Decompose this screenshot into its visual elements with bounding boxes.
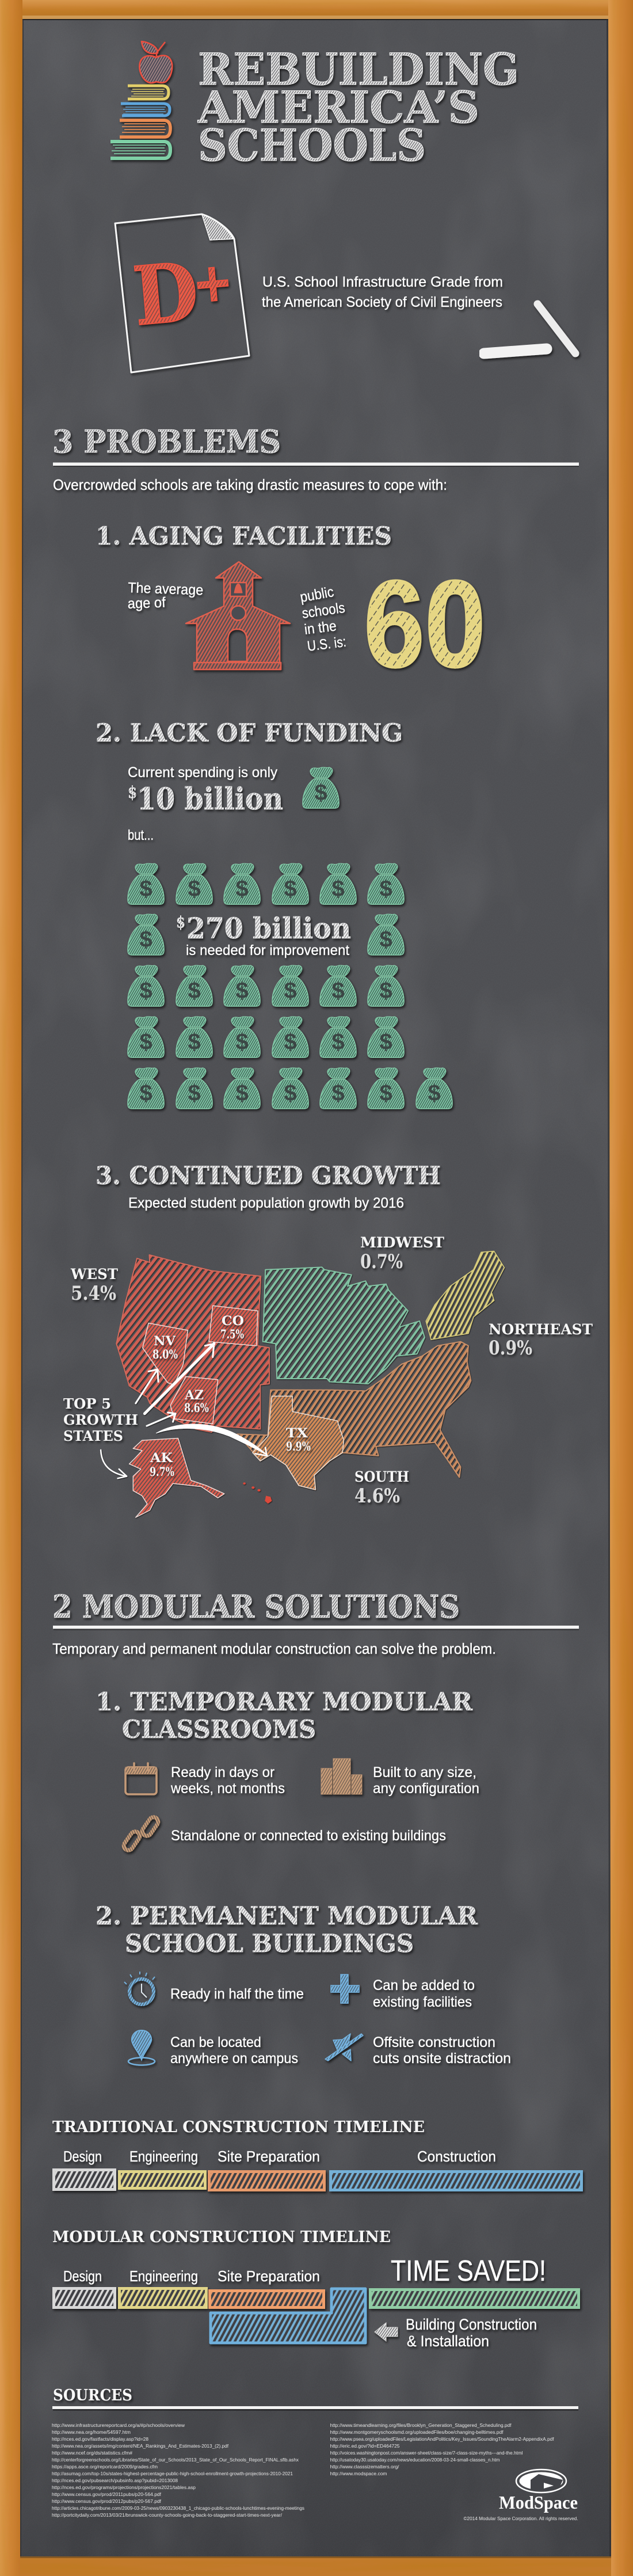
text: public schools in the U.S. is: [299, 584, 347, 655]
sources list: left column: http://articles.chicagotribune.com/2009-03-25/news/0903230438_1_chicago-public-schools-lunchtimes-evening-meetings: [52, 2505, 304, 2511]
timeline labels: Engineering: [129, 2267, 198, 2285]
map state: Alaska: [129, 1439, 224, 1517]
money bag grid: $: [139, 1080, 152, 1106]
money bag grid: $: [188, 876, 201, 901]
timeline labels: [63, 2148, 496, 2165]
map state: Arizona: [170, 1376, 218, 1424]
timeline bars: [54, 2289, 579, 2343]
text: ready in days: weeks, not months: [170, 1780, 285, 1797]
text: needed for improvement: is needed for improvement: [186, 942, 349, 958]
text: the average age of: [127, 580, 204, 612]
text: offsite construction: [373, 2034, 511, 2067]
icon: schoolhouse: [186, 562, 290, 669]
sources list: right column: http://www.classsizematters.org/: [330, 2464, 399, 2470]
sources list: right column: http://voices.washingtonpost.com/answer-sheet/class-size/7-class-size-myths---and-the.html: [330, 2450, 523, 2456]
sources list: left column: http://www.census.gov/prod/2011pubs/p20-564.pdf: [52, 2491, 162, 2497]
label: Colorado: 7.5%: [220, 1327, 244, 1341]
money bag grid: $: [139, 927, 152, 952]
text: standalone or connected: Standalone or connected to existing buildings: [171, 1828, 446, 1844]
timeline labels: Design: [63, 2148, 102, 2165]
icon: chain link: [122, 1816, 160, 1852]
label: Texas: TX: [286, 1426, 308, 1441]
title: [197, 44, 519, 171]
grade D plus: +: [190, 250, 235, 315]
label: midwest: MIDWEST: [360, 1234, 444, 1251]
icon: clock: [124, 1972, 155, 2004]
sources list: right column: http://eric.ed.gov/?id=ED464725: [330, 2443, 400, 2449]
text: building construction and installation: & Installation: [407, 2333, 489, 2350]
heading: permanent modular school buildings: [96, 1902, 478, 1958]
label: Alaska: AK: [150, 1451, 173, 1466]
sources list: left column: [52, 2422, 304, 2518]
text: can be located: [170, 2034, 298, 2067]
text: building construction and installation: [406, 2316, 537, 2350]
paper outline: [115, 214, 249, 372]
heading: temporary modular classrooms: [96, 1688, 472, 1744]
sources list: left column: http://portcitydaily.com/2013/03/21/brunswick-county-schools-going-back-to-staggered-start-times-next-year/: [52, 2512, 283, 2518]
label: south: 4.6%: [354, 1485, 400, 1508]
heading: traditional timeline: TRADITIONAL CONSTRUCTION TIMELINE: [52, 2118, 425, 2136]
text: ready in half the time: Ready in half the time: [170, 1986, 304, 2002]
text: built to any size: [373, 1764, 479, 1797]
money bag grid: $: [235, 1029, 249, 1055]
icon: yellow book: [128, 86, 169, 99]
timeline labels: Construction: [417, 2148, 496, 2165]
icon: orange book: [120, 120, 170, 137]
sources list: left column: http://centerforgreenschools.org/Libraries/State_of_our_Schools/2013_State_of_Our_Schools_Report_FINAL.sflb.ashx: [52, 2457, 299, 2463]
text: can be added: Can be added to: [373, 1977, 475, 1993]
label: midwest: 0.7%: [360, 1250, 403, 1273]
sources list: left column: http://asumag.com/top-10s/states-highest-percentage-public-high-school-enrollment-growth-projections-2010-2021: [52, 2471, 293, 2476]
label: top 5 growth states: [63, 1395, 138, 1444]
sources list: left column: http://www.nea.org/home/54597.htm: [52, 2429, 131, 2435]
icon: green book: [110, 142, 170, 158]
map labels: [63, 1234, 593, 1508]
money bag grid: $: [235, 1080, 249, 1106]
icon: plus: [331, 1974, 359, 2003]
heading: sources: SOURCES: [53, 2387, 132, 2404]
heading: temporary modular classrooms: CLASSROOMS: [122, 1715, 316, 1744]
heading: 3 problems: 3 PROBLEMS: [52, 423, 281, 460]
intro text: problems: Overcrowded schools are taking drastic measures to cope with:: [53, 476, 447, 493]
label: Nevada: 8.0%: [152, 1347, 178, 1361]
grade caption: U.S. School Infrastructure Grade from: [262, 274, 503, 290]
icon: single money bag: $: [314, 780, 327, 805]
sources list: right column: http://www.psea.org/uploadedFiles/LegislationAndPolitics/Key_Issues/SoundingTheAlarm2-AppendixA.pdf: [330, 2436, 554, 2442]
arrows to top growth states: [101, 1344, 268, 1478]
text: built to any size: any configuration: [373, 1780, 479, 1797]
money bag grid: $: [188, 978, 201, 1003]
title: AMERICA’S: [197, 82, 479, 133]
icon: map pin: [128, 2030, 155, 2065]
heading: 3 problems: [52, 423, 579, 467]
graded paper icon: [115, 214, 249, 372]
heading: sources: [52, 2387, 578, 2411]
money bag grid: $: [331, 876, 345, 901]
label: top 5 growth states: STATES: [63, 1428, 123, 1444]
stat: 270 billion: $: [176, 914, 185, 931]
label: top 5 growth states: GROWTH: [63, 1411, 138, 1428]
stat: 270 billion: 270 billion: [186, 911, 351, 945]
timeline labels: Site Preparation: [218, 2148, 320, 2165]
map state: Colorado: [209, 1306, 258, 1346]
sources list: right column: [330, 2422, 554, 2476]
map region: midwest: [263, 1267, 425, 1384]
title: SCHOOLS: [198, 120, 426, 171]
copyright: ©2014 Modular Space Corporation. All rights reserved.: [464, 2516, 578, 2521]
map region: west: [116, 1255, 269, 1432]
chalk sticks: [484, 304, 575, 353]
timeline bars: [54, 2170, 581, 2190]
timeline labels: Design: [63, 2267, 102, 2285]
icon: muted sound: [325, 2034, 363, 2061]
text: current spending: Current spending is only: [128, 764, 277, 781]
label: Arizona: 8.6%: [184, 1401, 209, 1415]
text: public schools in the U.S. is: public: [299, 584, 335, 606]
icon: blue book: [121, 104, 170, 116]
text: can be added: existing facilities: [373, 1994, 472, 2010]
logo mark: [516, 2470, 566, 2493]
label: west: [70, 1266, 118, 1305]
text: built to any size: Built to any size,: [373, 1764, 476, 1780]
money bag grid: $: [379, 927, 392, 952]
label: south: SOUTH: [354, 1468, 409, 1485]
money bag grid: $: [379, 1029, 392, 1055]
sources list: right column: http://www.modspace.com: [330, 2471, 387, 2476]
sources list: left column: http://www.ncef.org/ds/statistics.cfm#: [52, 2450, 132, 2456]
label: Alaska: [150, 1451, 174, 1479]
label: Texas: 9.9%: [286, 1439, 311, 1453]
logo wordmark: ModSpace: [499, 2492, 578, 2513]
grade caption: [262, 274, 503, 310]
label: Colorado: [220, 1314, 244, 1341]
ModSpace logo: [464, 2470, 578, 2521]
big number 60: 60: [364, 554, 486, 693]
text: can be added: [373, 1977, 475, 2010]
money bag grid: $: [284, 876, 297, 901]
label: northeast: [489, 1321, 593, 1360]
text: public schools in the U.S. is: in the: [303, 618, 337, 638]
US map: [101, 1251, 504, 1517]
money bag grid: [128, 863, 452, 1109]
arrow: building construction pointer: [375, 2323, 398, 2341]
sources list: left column: http://nces.ed.gov/pubsearch/pubsinfo.asp?pubid=2013008: [52, 2478, 178, 2483]
sources list: left column: https://apps.asce.org/reportcard/2009/grades.cfm: [52, 2464, 158, 2470]
label: Nevada: [152, 1334, 178, 1361]
money bag grid: $: [331, 1080, 345, 1106]
heading: aging facilities: 1. AGING FACILITIES: [96, 522, 392, 551]
heading: permanent modular school buildings: 2. PERMANENT MODULAR: [96, 1902, 478, 1931]
label: Nevada: NV: [154, 1334, 176, 1349]
sources list: left column: http://www.census.gov/prod/2012pubs/p20-567.pdf: [52, 2498, 162, 2504]
label: Arizona: AZ: [184, 1388, 204, 1403]
grade caption: the American Society of Civil Engineers: [262, 294, 502, 310]
modular timeline chart: [54, 2267, 579, 2343]
money bag grid: $: [428, 1080, 441, 1106]
money bag grid: $: [284, 978, 297, 1003]
label: northeast: 0.9%: [489, 1337, 532, 1360]
icon: apple and stack of books: [110, 41, 172, 158]
heading: lack of funding: 2. LACK OF FUNDING: [96, 719, 403, 748]
traditional timeline chart: [54, 2148, 581, 2190]
timeline labels: Site Preparation: [218, 2267, 320, 2285]
label: south: [354, 1468, 409, 1508]
text: public schools in the U.S. is: schools: [301, 600, 346, 622]
icon: calendar: [125, 1763, 157, 1794]
money bag grid: $: [139, 1029, 152, 1055]
heading: continued growth: 3. CONTINUED GROWTH: [96, 1162, 441, 1190]
icon: single money bag: [303, 767, 339, 808]
intro text: solutions: Temporary and permanent modular construction can solve the problem.: [52, 1640, 496, 1657]
grade D plus: D: [129, 245, 202, 344]
money bag grid: $: [235, 876, 249, 901]
money bag grid: $: [139, 876, 152, 901]
map state: Nevada: [143, 1323, 188, 1385]
money bag grid: $: [331, 978, 345, 1003]
map state: Hawaii: [243, 1482, 272, 1504]
text: building construction and installation: Building Construction: [406, 2316, 537, 2333]
label: midwest: [360, 1234, 444, 1273]
sources list: left column: http://www.nea.org/assets/img/content/NEA_Rankings_And_Estimates-2013_(2).pdf: [52, 2443, 229, 2449]
sources list: right column: http://usatoday30.usatoday.com/news/education/2008-03-24-small-classes_n.htm: [330, 2457, 499, 2463]
map region: south: [237, 1342, 471, 1490]
map state: Texas: [253, 1396, 344, 1490]
text: but: but...: [128, 827, 154, 843]
text: ready in days: Ready in days or: [171, 1764, 274, 1780]
text: offsite construction: cuts onsite distraction: [373, 2050, 511, 2067]
money bag grid: $: [379, 1080, 392, 1106]
timeline labels: Engineering: [129, 2148, 198, 2165]
label: west: 5.4%: [71, 1282, 116, 1305]
text: the average age of: age of: [127, 595, 166, 612]
heading: permanent modular school buildings: SCHOOL BUILDINGS: [125, 1930, 414, 1958]
money bag grid: $: [284, 1029, 297, 1055]
timeline labels: [63, 2267, 320, 2285]
money bag grid: $: [188, 1029, 201, 1055]
callout: time saved: TIME SAVED!: [391, 2254, 546, 2287]
icon: apple: [139, 41, 172, 83]
text: can be located: anywhere on campus: [170, 2050, 298, 2067]
heading: 2 modular solutions: 2 MODULAR SOLUTIONS: [52, 1588, 460, 1625]
heading: modular timeline: MODULAR CONSTRUCTION TIMELINE: [52, 2228, 391, 2246]
text: offsite construction: Offsite construction: [373, 2034, 495, 2050]
label: Arizona: [184, 1388, 209, 1415]
sources list: left column: http://nces.ed.gov/programs/projections/projections2021/tables.asp: [52, 2484, 196, 2490]
sources list: right column: http://www.timeandlearning.org/files/Brooklyn_Generation_Staggered_Scheduling.pdf: [330, 2422, 512, 2428]
money bag grid: $: [379, 978, 392, 1003]
paper corner fold: [202, 215, 233, 240]
title: REBUILDING: [198, 44, 519, 95]
money bag grid: $: [235, 978, 249, 1003]
label: top 5 growth states: TOP 5: [63, 1395, 111, 1412]
money bag grid: $: [379, 876, 392, 901]
label: west: WEST: [70, 1266, 118, 1283]
label: northeast: NORTHEAST: [489, 1321, 593, 1338]
money bag grid: $: [188, 1080, 201, 1106]
label: Alaska: 9.7%: [150, 1464, 174, 1479]
text: expected growth: Expected student population growth by 2016: [128, 1195, 404, 1211]
stat: 10 billion: 10 billion: [137, 782, 283, 817]
icon: building bars: [321, 1759, 362, 1794]
stat: 10 billion: $: [128, 783, 137, 802]
map region: northeast: [426, 1251, 504, 1340]
label: Colorado: CO: [222, 1314, 244, 1329]
money bag grid: $: [139, 978, 152, 1003]
text: can be located: Can be located: [170, 2034, 261, 2050]
text: the average age of: The average: [128, 580, 204, 599]
text: public schools in the U.S. is: U.S. is:: [306, 634, 347, 655]
heading: temporary modular classrooms: 1. TEMPORARY MODULAR: [96, 1688, 472, 1717]
sources list: left column: http://www.infrastructurereportcard.org/a/#p/schools/overview: [52, 2422, 185, 2428]
text: ready in days: [170, 1764, 285, 1797]
money bag grid: $: [284, 1080, 297, 1106]
label: Texas: [286, 1426, 311, 1453]
money bag grid: $: [331, 1029, 345, 1055]
sources list: right column: http://www.montgomeryschoolsmd.org/uploadedFiles/boe/changing-belltimes.pdf: [330, 2429, 504, 2435]
sources list: left column: http://nces.ed.gov/fastfacts/display.asp?id=28: [52, 2436, 148, 2442]
